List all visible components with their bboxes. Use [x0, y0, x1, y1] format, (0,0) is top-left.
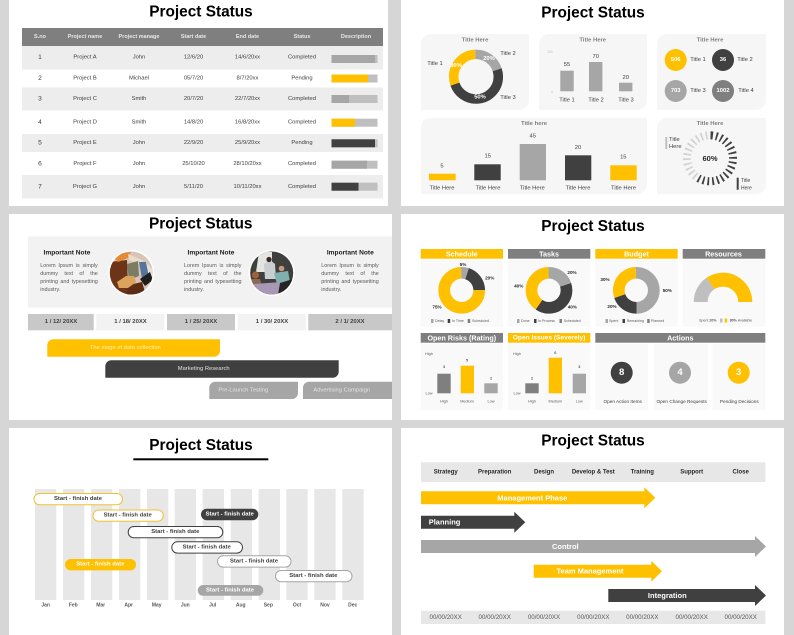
arrow: control	[421, 536, 766, 557]
month labels: Aug	[236, 602, 246, 608]
month labels: Jul	[209, 602, 217, 608]
row: Project F: 6	[38, 160, 42, 168]
month labels: May	[152, 602, 162, 608]
card: number circles: 1002	[717, 88, 729, 94]
row: Project B: Michael	[129, 76, 149, 82]
note 3: printing and typesetting	[321, 279, 379, 285]
card: tasks: Scheduled	[564, 319, 581, 323]
row: Project E: 25/9/20xx	[235, 140, 260, 146]
card: open risks	[421, 333, 503, 410]
row: Project D: Completed	[288, 120, 316, 126]
note 2: printing and typesetting	[184, 279, 241, 285]
card: open risks: High	[425, 352, 433, 356]
row: Project G: Completed	[288, 184, 316, 190]
title: Project Status	[149, 4, 253, 20]
pill: grey filled: Start - finish date	[206, 587, 255, 593]
phase header bar	[421, 462, 765, 482]
arrow: integration: Integration	[648, 591, 687, 600]
card: wide bar chart: Title Here	[566, 185, 590, 191]
month labels: Apr	[124, 602, 133, 608]
card: actions: 3	[736, 367, 741, 378]
card: column chart: 55	[564, 62, 570, 68]
card: radial progress: Title Here	[697, 121, 724, 127]
pill: yellow filled: Start - finish date	[76, 562, 125, 568]
row: Project G: 5/11/20	[184, 184, 203, 190]
card: donut chart: 30%	[450, 63, 462, 69]
row: Project A: 1	[38, 54, 42, 61]
table header: End date	[236, 34, 259, 40]
card: budget: 50%	[663, 288, 672, 293]
bar: data collection: The stage of data collection	[90, 345, 161, 351]
note 2: industry.	[184, 287, 204, 293]
note 3: Lorem Ipsum is simply	[321, 263, 379, 269]
date footer bar: 00/00/20XX	[577, 614, 609, 621]
note 1: Lorem Ipsum is simply	[40, 263, 98, 269]
row: Project A: John	[133, 55, 145, 61]
row: Project B: 8/7/20xx	[237, 76, 259, 82]
card: column chart: Title 2	[588, 98, 604, 104]
card: column chart: Title 3	[618, 98, 634, 104]
photo: hands on tablet	[108, 250, 154, 296]
table header: S.no	[34, 34, 47, 40]
card: tasks: 40%	[514, 284, 523, 288]
card: number circles: Title 3	[690, 88, 706, 94]
card: open risks: Low	[426, 392, 433, 396]
row: Project D: 14/8/20	[184, 120, 203, 126]
row: Project G: John	[133, 184, 145, 190]
card: open issues: High	[513, 352, 521, 356]
card: actions: 4	[677, 367, 683, 378]
pill: grey outline 2	[276, 570, 352, 582]
table header: Project manage	[119, 34, 159, 40]
row: Project G	[22, 175, 383, 198]
row: Project B: 2	[38, 75, 42, 82]
card: open risks: Medium	[460, 399, 474, 403]
table header: Status	[294, 34, 310, 40]
row: Project E: Project E	[73, 140, 97, 146]
table header	[22, 28, 383, 46]
panel: notes and timeline	[9, 214, 392, 420]
date footer bar	[421, 611, 765, 624]
card: schedule: Schedule	[446, 250, 478, 258]
row: Project E: 22/9/20	[184, 140, 203, 146]
pill: dark filled: Start - finish date	[206, 511, 254, 517]
card: donut chart: Title 2	[500, 51, 516, 57]
card: actions: Open Action Items	[604, 399, 643, 404]
bar: data collection	[47, 339, 220, 357]
card: schedule: 75%	[432, 304, 442, 310]
bar: pre-launch testing	[209, 382, 298, 399]
card: tasks: 20%	[567, 270, 577, 275]
row: Project D: 4	[38, 119, 42, 126]
card: actions: Pending Decisions	[720, 399, 759, 404]
note 1	[40, 250, 98, 293]
card: wide bar chart: 45	[529, 134, 536, 140]
panel: KPI dashboard	[401, 214, 784, 420]
card: open issues: Open Issues (Severely)	[513, 334, 585, 342]
note 1: dummy text of the	[40, 271, 98, 277]
card: column chart: 20	[622, 75, 629, 81]
card: donut chart: Title 3	[500, 95, 516, 101]
card: resources: Spent 20%	[699, 318, 717, 322]
note 1: industry.	[40, 287, 60, 293]
row: Project B: Project B	[73, 76, 97, 82]
card: wide bar chart: Title here	[521, 121, 548, 127]
row: Project A: Project A	[73, 55, 97, 61]
card: budget: Remaining	[627, 319, 644, 323]
row: Project A: 14/6/20xx	[235, 55, 260, 61]
date footer bar: 00/00/20XX	[430, 614, 462, 621]
row: Project E: Pending	[291, 140, 313, 146]
row: Project E: 5	[38, 140, 42, 146]
card: radial progress	[657, 118, 766, 194]
phase header bar: Design	[534, 469, 554, 475]
row: Project D: Project D	[73, 120, 97, 126]
card: column chart: Title Here	[579, 37, 607, 43]
card: open issues: 2	[531, 376, 533, 380]
note 3: Important Note	[327, 250, 374, 256]
pill: dark outline 1: Start - finish date	[151, 529, 200, 535]
card: resources	[683, 249, 765, 327]
row: Project D: 16/8/20xx	[235, 120, 260, 126]
title: Project Status	[541, 218, 645, 235]
card: budget	[595, 249, 678, 327]
card: schedule: Scheduled	[472, 319, 489, 323]
card: donut chart: Title Here	[462, 37, 489, 43]
card: actions	[595, 333, 765, 410]
date row	[28, 314, 392, 330]
row: Project F: Project F	[73, 161, 97, 167]
card: radial progress: Title	[669, 137, 680, 143]
month labels: Dec	[348, 602, 357, 608]
row: Project B: Pending	[291, 76, 313, 82]
card: donut chart: 20%	[483, 56, 495, 62]
card: wide bar chart: Title Here	[611, 185, 636, 191]
row: Project E: John	[133, 140, 145, 146]
row: Project G: 7	[38, 184, 42, 190]
panel: project table	[9, 0, 388, 206]
arrow: planning: Planning	[429, 518, 461, 527]
note 3	[321, 250, 379, 293]
pill: dark filled	[201, 509, 258, 520]
card: number circles: Title Here	[697, 37, 724, 43]
date footer bar: 00/00/20XX	[528, 614, 560, 621]
pill: grey outline 1: Start - finish date	[230, 558, 279, 564]
card: budget: 30%	[600, 277, 610, 282]
card: budget: Budget	[624, 250, 649, 258]
phase header bar: Develop & Test	[572, 469, 615, 475]
title underline	[133, 458, 268, 460]
bar: advertising campaign	[303, 382, 392, 399]
card: actions: Open Change Requests	[657, 399, 708, 404]
card: column chart: 0	[551, 90, 553, 94]
card: number circles: 506	[671, 57, 681, 63]
card: open risks: 5	[466, 358, 468, 362]
card: wide bar chart: 20	[575, 145, 581, 151]
row: Project A	[22, 46, 383, 70]
title: Project Status	[149, 437, 253, 454]
card: number circles: 36	[720, 57, 727, 63]
note 1: Important Note	[44, 250, 91, 256]
month labels: Jun	[181, 602, 190, 608]
bar: pre-launch testing: Pre-Launch Testing	[218, 388, 268, 394]
card: budget: Planned	[651, 319, 664, 323]
phase header bar: Training	[631, 469, 654, 475]
note 2: dummy text of the	[184, 271, 241, 277]
row: Project C: 20/7/20	[184, 96, 203, 102]
month labels: Nov	[320, 602, 330, 608]
month labels: Oct	[293, 602, 301, 608]
row: Project C: Smith	[132, 96, 146, 102]
card: open risks: 3	[443, 365, 445, 369]
phase header bar: Strategy	[434, 469, 458, 475]
row: Project F: 28/10/20xx	[233, 161, 262, 167]
card: radial progress: Here	[669, 144, 682, 150]
phase header bar: Close	[733, 469, 750, 475]
card: open issues: 3	[578, 365, 580, 369]
card: donut chart: 50%	[474, 95, 486, 101]
month labels: Mar	[96, 602, 105, 608]
month labels: Jan	[41, 602, 50, 608]
card: number circles	[657, 34, 766, 110]
date row: 1 / 25/ 20XX	[185, 319, 217, 325]
date row: 2 / 1/ 20XX	[335, 319, 365, 325]
row: Project C	[22, 88, 383, 110]
card: open issues	[508, 333, 590, 410]
card: tasks: Tasks	[539, 250, 559, 258]
card: number circles: 703	[671, 88, 681, 94]
row: Project B	[22, 70, 383, 88]
card: actions: Actions	[667, 334, 693, 342]
pill: yellow filled	[65, 559, 136, 570]
arrow: integration	[608, 585, 766, 606]
photo: team meeting	[249, 250, 295, 296]
bar: advertising campaign: Advertising Campaign	[313, 388, 370, 394]
note 3: dummy text of the	[321, 271, 379, 277]
pill: grey outline 1	[218, 556, 291, 567]
month columns	[35, 489, 364, 600]
card: open risks: Low	[488, 399, 495, 403]
card: wide bar chart: Title Here	[520, 185, 545, 191]
month labels: Feb	[69, 602, 78, 608]
date row: 1 / 30/ 20XX	[256, 319, 288, 325]
row: Project A: Completed	[288, 55, 316, 61]
card: open issues: High	[528, 399, 536, 403]
card: donut chart	[421, 34, 529, 110]
card: radial progress: Here	[741, 186, 752, 192]
table header: Start date	[181, 34, 206, 40]
row: Project C: 3	[38, 96, 42, 102]
row: Project E	[22, 134, 383, 152]
row: Project G: 10/11/20xx	[234, 184, 262, 190]
row: Project A: 12/6/20	[184, 55, 203, 61]
card: actions: 8	[619, 367, 624, 378]
date row: 1 / 18/ 20XX	[114, 319, 147, 325]
pill: yellow outline 1: Start - finish date	[54, 496, 103, 502]
card: number circles: Title 2	[737, 57, 753, 63]
pill: dark outline 2: Start - finish date	[183, 544, 231, 550]
phase header bar: Preparation	[478, 469, 512, 475]
bar: marketing research	[105, 360, 339, 378]
table header: Project name	[68, 34, 102, 40]
card: wide bar chart: Title Here	[430, 185, 454, 191]
date footer bar: 00/00/20XX	[479, 614, 511, 621]
card: radial progress: 60%	[702, 154, 718, 163]
note 2	[184, 250, 242, 293]
card: budget: 20%	[607, 304, 617, 309]
date footer bar: 00/00/20XX	[626, 614, 658, 621]
note 2: Important Note	[188, 250, 235, 256]
pill: grey filled	[198, 585, 263, 596]
note 2: Lorem Ipsum is simply	[184, 263, 242, 269]
phase header bar: Support	[680, 469, 703, 475]
month labels: Sep	[264, 602, 273, 608]
card: open risks: High	[440, 399, 448, 403]
table header: Description	[341, 34, 372, 40]
row: Project D: Smith	[132, 120, 146, 126]
card: tasks: In Process	[538, 319, 555, 323]
row: Project B: 05/7/20	[184, 76, 203, 82]
pill: yellow outline 2	[93, 510, 163, 521]
pill: dark outline 2	[172, 542, 242, 553]
card: tasks: 40%	[568, 304, 577, 310]
arrow: management phase	[421, 487, 655, 508]
card: column chart: 100	[547, 50, 553, 54]
row: Project G: Project G	[73, 184, 98, 190]
card: schedule: In Time	[452, 319, 464, 323]
note 3: industry.	[321, 287, 341, 293]
title: Project Status	[541, 433, 645, 450]
card: wide bar chart	[421, 118, 647, 194]
date footer bar: 00/00/20XX	[676, 614, 708, 621]
month labels	[41, 602, 357, 608]
card: open risks: Open Risks (Rating)	[427, 334, 497, 342]
row: Project F: John	[133, 161, 145, 167]
arrow: team management	[534, 561, 662, 582]
title: Project Status	[541, 4, 645, 22]
row: Project D	[22, 110, 383, 134]
card: resources: Resources	[705, 250, 742, 258]
card: resources: 80% Available	[730, 318, 752, 322]
card: open issues: 6	[554, 351, 556, 355]
date footer bar: 00/00/20XX	[725, 614, 757, 621]
card: wide bar chart: 15	[620, 155, 627, 161]
date row: 1 / 12/ 20XX	[45, 319, 77, 325]
card: open issues: Low	[576, 399, 583, 403]
pill: grey outline 2: Start - finish date	[289, 573, 338, 579]
row: Project F	[22, 152, 383, 175]
panel: monthly gantt	[9, 428, 392, 635]
card: tasks	[508, 249, 590, 327]
card: schedule: 20%	[485, 276, 494, 280]
row: Project C: Project C	[73, 96, 97, 102]
card: budget: Spent	[609, 319, 618, 323]
arrow: control: Control	[552, 542, 579, 551]
row: Project F: 25/10/20	[182, 161, 205, 167]
row: Project C: Completed	[288, 96, 316, 102]
row: Project F: Completed	[288, 161, 316, 167]
card: radial progress: Title	[741, 178, 750, 184]
arrow: team management: Team Management	[557, 567, 624, 576]
card: open issues: Medium	[549, 399, 562, 403]
title: Project Status	[149, 216, 252, 232]
card: tasks: Done	[521, 319, 530, 323]
card: number circles: Title 1	[690, 57, 706, 63]
row: Project C: 22/7/20xx	[235, 96, 260, 102]
bar: marketing research: Marketing Research	[178, 366, 230, 372]
card: wide bar chart: 5	[440, 164, 444, 170]
card: column chart: Title 1	[559, 98, 575, 104]
panel: phase roadmap	[401, 428, 784, 635]
card: wide bar chart: Title Here	[476, 185, 500, 191]
card: schedule: 5%	[460, 262, 466, 267]
note 1: printing and typesetting	[40, 279, 98, 285]
pill: yellow outline 2: Start - finish date	[104, 512, 152, 518]
arrow: management phase: Management Phase	[497, 493, 567, 502]
pill: yellow outline 1	[34, 494, 122, 505]
card: schedule: Delay	[435, 319, 444, 323]
card: open risks: 2	[490, 376, 492, 380]
notes band	[28, 236, 392, 308]
card: wide bar chart: 15	[484, 153, 491, 159]
card: number circles: Title 4	[738, 88, 755, 94]
pill: dark outline 1	[128, 526, 223, 538]
card: donut chart: Title 1	[427, 61, 443, 67]
arrow: planning	[421, 512, 525, 533]
card: column chart: 70	[592, 54, 599, 60]
card: schedule	[421, 249, 503, 327]
card: open issues: Low	[514, 392, 521, 396]
card: column chart	[539, 34, 647, 110]
panel: chart dashboard	[401, 0, 784, 206]
